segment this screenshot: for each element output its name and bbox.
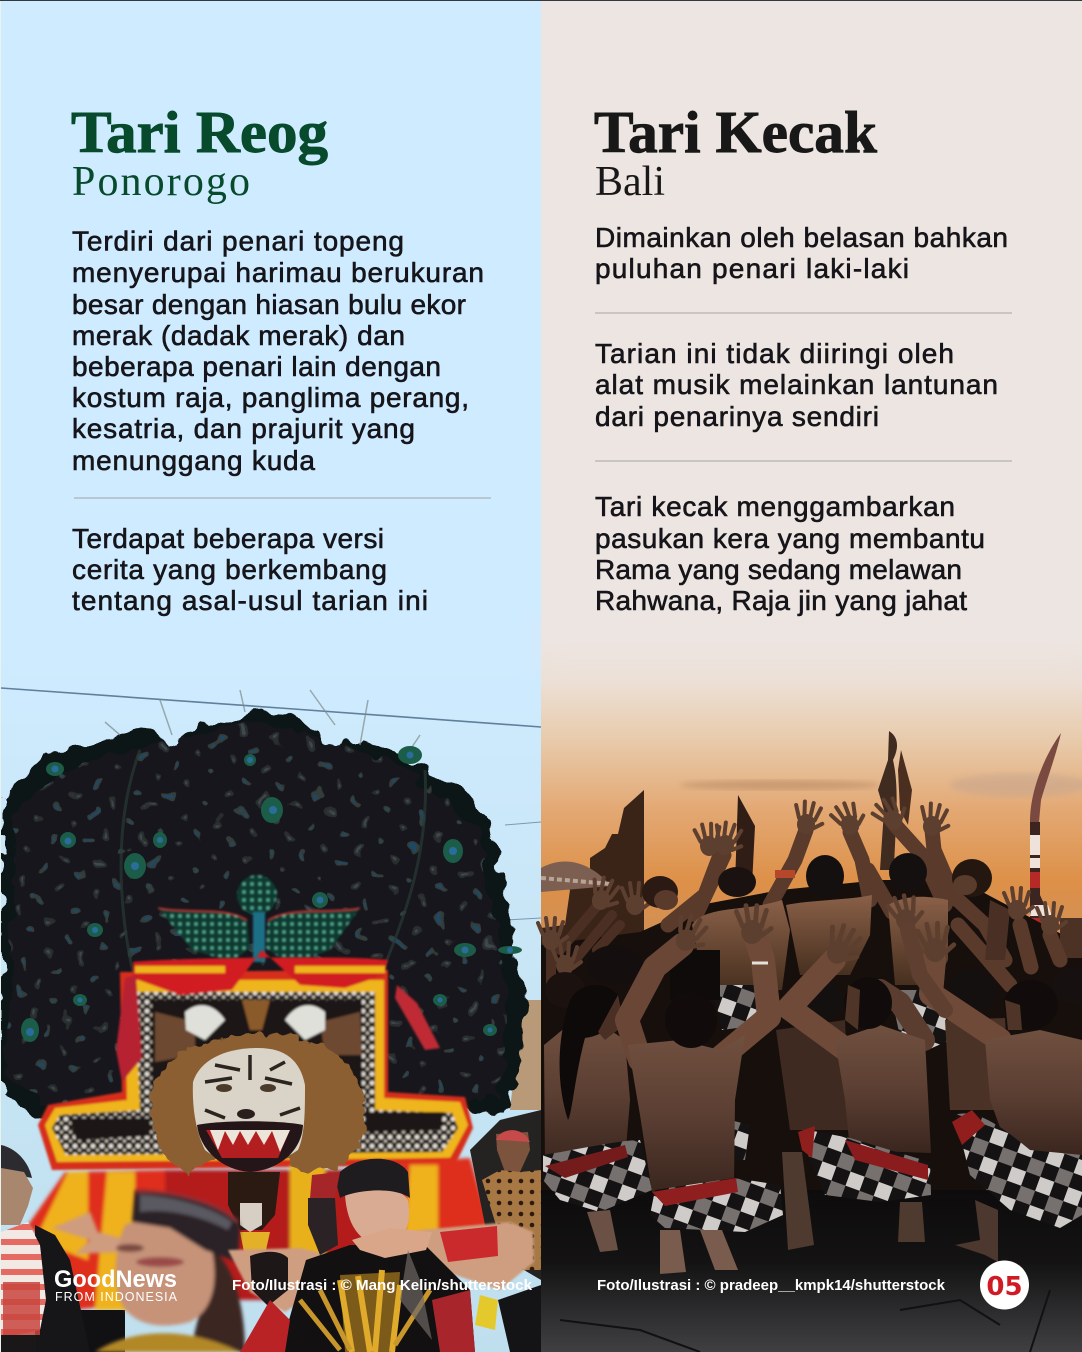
page number badge	[980, 1260, 1029, 1310]
page top edge	[0, 0, 1082, 1]
photo credit: Kecak: Foto/Ilustrasi : © pradeep__kmpk14/shutterstock	[597, 1277, 946, 1294]
temple silhouette centre	[735, 795, 755, 885]
text block: Reog description: menunggang kuda	[72, 445, 315, 476]
page number badge: 05	[986, 1272, 1023, 1302]
text block: Kecak story: Rama yang sedang melawan	[595, 554, 962, 585]
striped flag pole	[1030, 733, 1061, 935]
hands at left background	[538, 875, 651, 975]
text block: Reog description: beberapa penari lain dengan	[72, 351, 441, 382]
photo: Reog Ponorogo performance	[1, 660, 541, 1352]
heading: Tari Reog: Tari Reog	[71, 99, 328, 165]
subheading: Bali: Bali	[595, 159, 665, 205]
text block: Kecak dancers: Dimainkan oleh belasan bahkan	[595, 222, 1008, 253]
text block: Reog origin versions: cerita yang berkembang	[72, 554, 387, 585]
text block: Reog origin versions	[72, 523, 428, 616]
text block: Kecak dancers: puluhan penari laki-laki	[595, 253, 909, 284]
heading: Tari Kecak: Tari Kecak	[594, 99, 877, 165]
panel: Tari Reog background	[1, 1, 541, 1352]
text block: Kecak dancers	[595, 222, 1008, 284]
temple silhouette left	[541, 790, 644, 950]
logo: GoodNews from Indonesia: FROM INDONESIA	[55, 1290, 178, 1304]
peacock feather fan	[1, 690, 526, 1130]
dancer: far left with long hair	[543, 985, 652, 1252]
ceremonial pole	[878, 731, 912, 870]
front dancer, foreground left	[52, 1190, 245, 1352]
text block: Reog origin versions: Terdapat beberapa versi	[72, 523, 384, 554]
text block: Kecak no instruments	[595, 338, 998, 432]
logo: GoodNews from Indonesia: GoodNews	[54, 1266, 177, 1293]
red drape	[133, 950, 388, 995]
text block: Reog description: menyerupai harimau berukuran	[72, 257, 484, 288]
text block: Reog description	[72, 226, 484, 476]
right man with leopard vest	[470, 1110, 541, 1280]
white left edge	[0, 1, 1, 1352]
text block: Reog description: Terdiri dari penari topeng	[72, 226, 404, 256]
mask frame and crest	[38, 950, 473, 1170]
text block: Kecak story: Tari kecak menggambarkan	[595, 491, 955, 522]
dancer: far right	[886, 892, 1082, 1262]
middle row dancers	[545, 945, 1082, 1160]
left man in striped shirt	[1, 1145, 90, 1352]
text block: Kecak no instruments: alat musik melainkan lantunan	[595, 369, 998, 400]
text block: Reog description: besar dengan hiasan bulu ekor	[72, 289, 466, 320]
text block: Kecak story: Rahwana, Raja jin yang jahat	[595, 585, 967, 616]
text block: Kecak no instruments: dari penarinya sendiri	[595, 401, 879, 432]
subheading: Ponorogo: Ponorogo	[72, 159, 250, 205]
main dancer, foreground right	[228, 1159, 541, 1352]
peacock crown	[158, 875, 360, 965]
ground	[541, 1190, 1082, 1352]
back row dancers	[642, 793, 1066, 990]
text block: Kecak story	[595, 491, 985, 616]
tiger mask	[150, 1034, 366, 1252]
photo: Kecak dance at sunset	[538, 620, 1082, 1352]
cloth skirt	[28, 1158, 490, 1310]
text block: Reog description: merak (dadak merak) dan	[72, 320, 405, 351]
text block: Reog origin versions: tentang asal-usul tarian ini	[72, 585, 428, 616]
dark lower backdrop	[75, 1290, 370, 1352]
dancer: front centre-left	[627, 906, 783, 1274]
dark crowd backdrop	[541, 880, 1082, 1352]
temple-side raised arms	[551, 905, 620, 990]
checked sarongs in back row	[712, 985, 950, 1060]
text block: Kecak no instruments: Tarian ini tidak diiringi oleh	[595, 338, 954, 369]
panel: Tari Kecak background	[541, 1, 1082, 1352]
text block: Reog description: kesatria, dan prajurit yang	[72, 413, 415, 444]
text block: Reog description: kostum raja, panglima perang,	[72, 382, 469, 413]
text block: Kecak story: pasukan kera yang membantu	[595, 523, 985, 554]
fade into panel	[541, 620, 1082, 670]
dancer: centre-right	[782, 921, 931, 1250]
photo credit: Reog: Foto/Ilustrasi : © Mang Kelin/shutterstock	[232, 1277, 533, 1294]
